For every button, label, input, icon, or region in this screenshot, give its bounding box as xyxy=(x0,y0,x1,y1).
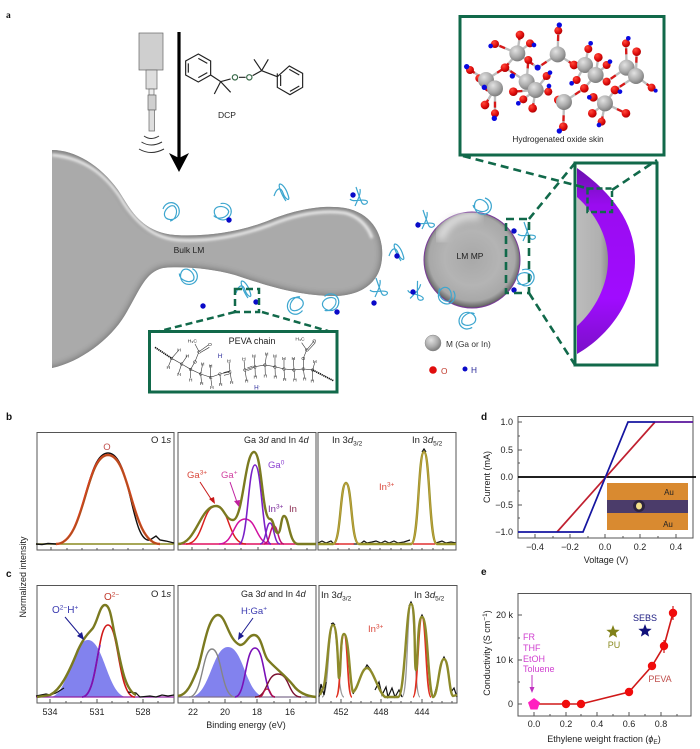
legend: atoms xyxy=(425,335,491,376)
chart: b In 3d xyxy=(318,432,456,550)
chain structure: H₃C xyxy=(295,336,305,342)
chart: b Ga 3d and In 4d: In xyxy=(289,504,297,515)
axis label: Normalized intensity: Normalized intensity xyxy=(18,536,28,618)
x tick labels: 0.4 xyxy=(591,719,603,729)
x tick labels: −0.4 xyxy=(526,542,544,552)
chain structure: H xyxy=(273,354,277,360)
chart: c In 3d: 3/2 xyxy=(342,596,352,602)
chain structure: O xyxy=(193,359,197,365)
x tick labels: 0.2 xyxy=(560,719,572,729)
x tick labels: 0.6 xyxy=(623,719,635,729)
x tick labels xyxy=(528,719,667,729)
x tick labels: 0.0 xyxy=(528,719,540,729)
chain structure: C xyxy=(263,363,267,369)
chain structure: · xyxy=(259,384,260,388)
chain structure: C xyxy=(228,369,232,375)
solvent list: FR xyxy=(523,632,535,642)
x tick labels: 0.2 xyxy=(634,542,646,552)
chart: c In 3d: In 3d xyxy=(321,590,342,601)
inset micrograph: Au xyxy=(664,488,674,497)
liquid metal microparticle xyxy=(424,212,520,308)
chain structure: H xyxy=(265,352,269,358)
chain structure: C xyxy=(305,348,309,354)
chain structure: C xyxy=(218,372,222,378)
legend: atoms: M (Ga or In) xyxy=(446,339,491,349)
chain structure: · xyxy=(222,353,224,357)
x tick labels: 452 xyxy=(333,707,349,717)
x tick labels: 20 xyxy=(220,707,230,717)
x tick labels xyxy=(188,707,295,717)
solvent list: THF xyxy=(523,643,541,653)
magnified cross-section of particle xyxy=(575,163,657,365)
chart: e conductivity versus ethylene fraction: PU xyxy=(608,640,620,650)
chain structure: H xyxy=(230,380,234,386)
y tick labels: 20 k xyxy=(496,610,513,620)
molecule model xyxy=(464,22,658,134)
chart: b Ga 3d and In 4d: Ga xyxy=(268,460,281,471)
x tick labels xyxy=(42,707,151,717)
chain structure: H xyxy=(189,377,193,383)
chart: c Ga 3d and In 4d: + xyxy=(263,606,267,612)
x tick labels: 444 xyxy=(414,707,430,717)
PEVA polymer chains and hydrogen atoms xyxy=(163,184,537,332)
y tick labels: 10 k xyxy=(496,655,513,665)
y tick labels: 0.0 xyxy=(500,472,513,482)
x tick labels: 0.0 xyxy=(599,542,611,552)
chart: b In 3d: In 3d xyxy=(412,435,433,446)
chain structure: O xyxy=(301,356,305,362)
panel label d: d xyxy=(481,412,487,423)
chain structure: C xyxy=(180,362,184,368)
bulk liquid metal droplet xyxy=(30,150,382,368)
chart: c O 1s xyxy=(36,586,174,717)
chain structure: H xyxy=(245,379,249,385)
chain structure: H xyxy=(274,374,278,380)
chart: e conductivity versus ethylene fraction: PEVA xyxy=(648,674,672,684)
marker: solvents pentagon xyxy=(528,698,540,710)
x tick labels: 18 xyxy=(252,707,262,717)
axis label: Binding energy: Binding energy (eV) xyxy=(206,720,286,730)
chart: d current versus voltage: Voltage (V) xyxy=(584,555,628,565)
chart: b Ga 3d and In 4d: In xyxy=(268,504,276,515)
chart: e conductivity versus ethylene fraction: SEBS xyxy=(633,613,657,623)
chart: b Ga 3d and In 4d xyxy=(178,432,316,550)
inset micrograph: Au xyxy=(663,520,673,529)
x tick labels xyxy=(526,542,682,552)
chart: b Ga 3d and In 4d: 3+ xyxy=(200,470,207,476)
chain structure: H xyxy=(242,357,246,363)
panel label a: a xyxy=(6,11,11,21)
chart: c O 1s: H xyxy=(67,605,74,616)
chain structure: C xyxy=(197,349,201,355)
chart: c O 1s: 2− xyxy=(112,592,119,598)
inset micrograph xyxy=(607,483,688,530)
chain structure: H xyxy=(219,382,223,388)
chart: c O 1s: O xyxy=(104,592,112,603)
y tick labels: −1.0 xyxy=(495,527,513,537)
chain structure: H xyxy=(254,374,258,380)
chart: c Ga 3d and In 4d xyxy=(178,586,316,717)
chart: c Ga 3d and In 4d: Ga 3d and In 4d xyxy=(241,589,307,599)
chart: c Ga 3d and In 4d: H:Ga xyxy=(241,606,263,617)
chart: c O 1s: O xyxy=(52,605,60,616)
panel label c: c xyxy=(6,569,12,580)
chart: e conductivity versus ethylene fraction: Conductivity (S cm xyxy=(482,621,492,696)
chain structure: H xyxy=(254,385,259,392)
chain structure: H xyxy=(292,356,296,362)
chart: c In 3d: In xyxy=(368,624,376,635)
y tick labels: −0.5 xyxy=(495,500,513,510)
y tick labels: 1.0 xyxy=(500,417,513,427)
x tick labels xyxy=(333,707,430,717)
marker: PU star xyxy=(606,625,620,638)
chart: e conductivity versus ethylene fraction: E xyxy=(653,739,658,746)
chain structure: C xyxy=(302,367,306,373)
solvent list: EtOH xyxy=(523,654,545,664)
chain structure: H xyxy=(201,362,205,368)
chain structure: C xyxy=(311,368,315,374)
label: Hydrogenated oxide skin: Hydrogenated oxide skin xyxy=(512,134,604,144)
y tick labels: 0.5 xyxy=(500,445,513,455)
chart: d current versus voltage xyxy=(482,416,696,565)
chain structure: H xyxy=(313,359,317,365)
chart: e conductivity versus ethylene fraction: ) xyxy=(482,610,492,613)
chain structure: H xyxy=(252,353,256,359)
chemical structure: DCP xyxy=(186,54,303,95)
chain structure: C xyxy=(243,368,247,374)
chart: c In 3d xyxy=(319,586,457,717)
panel label e: e xyxy=(481,567,487,578)
x tick labels: 531 xyxy=(89,707,105,717)
chart: e conductivity versus ethylene fraction xyxy=(482,594,691,746)
chart: b Ga 3d and In 4d: + xyxy=(234,470,238,476)
x tick labels: 22 xyxy=(188,707,198,717)
icon: sonication probe xyxy=(139,33,164,152)
chart: c O 1s: + xyxy=(74,604,78,612)
chart: c O 1s: O 1s xyxy=(151,589,171,600)
zoom indicator: droplet to PEVA chain xyxy=(160,289,328,331)
y tick labels xyxy=(495,417,513,537)
zoom indicator: particle to cross-section xyxy=(506,163,575,365)
chain structure: H xyxy=(218,353,222,360)
x tick labels: 0.4 xyxy=(670,542,682,552)
chart: c In 3d: 3+ xyxy=(376,624,384,630)
chain structure: H xyxy=(210,385,214,391)
chain structure: H xyxy=(282,356,286,362)
solvent list xyxy=(523,632,555,674)
chain structure: H xyxy=(186,353,190,359)
chain structure: H₃C xyxy=(188,339,197,345)
chain structure: C xyxy=(292,368,296,374)
chart: b Ga 3d and In 4d: 0 xyxy=(281,460,285,466)
chart: e conductivity versus ethylene fraction: −1 xyxy=(482,613,489,621)
chain structure: H xyxy=(227,358,231,364)
chart: b O 1s xyxy=(36,432,174,550)
marker: SEBS star xyxy=(638,624,652,637)
chart: d current versus voltage: Current (mA) xyxy=(482,451,492,503)
chain structure: H xyxy=(264,373,268,379)
chain structure: H xyxy=(209,363,213,369)
chain structure: C xyxy=(209,375,213,381)
zoom indicator: cross-section to oxide skin xyxy=(463,156,657,190)
chart: b In 3d: 3/2 xyxy=(353,440,363,448)
chain structure: H xyxy=(177,348,181,354)
chart: b Ga 3d and In 4d: 3+ xyxy=(276,504,284,510)
chain structure: H xyxy=(293,378,297,384)
chain structure: C xyxy=(189,367,193,373)
chart: b Ga 3d and In 4d: Ga xyxy=(221,470,234,481)
x tick labels: 16 xyxy=(285,707,295,717)
chart: e conductivity versus ethylene fraction: ) xyxy=(658,734,661,744)
label: LM MP: LM MP xyxy=(457,251,484,261)
chain structure: C xyxy=(282,367,286,373)
chart: e conductivity versus ethylene fraction: Ethylene weight fraction (ϕ xyxy=(547,734,653,744)
legend: atoms: O xyxy=(441,366,448,376)
chart: c In 3d: 5/2 xyxy=(435,596,445,602)
chart: b In 3d: 3+ xyxy=(387,482,395,488)
chain structure: H xyxy=(167,365,171,371)
chain structure: H xyxy=(311,379,315,385)
chain structure: C xyxy=(199,372,203,378)
legend: atoms: H xyxy=(471,365,477,375)
chain structure: C xyxy=(253,364,257,370)
chart: b O 1s: O 1s xyxy=(151,435,171,446)
chain structure xyxy=(155,336,333,392)
x tick labels: 534 xyxy=(42,707,58,717)
arrow: solvents to marker xyxy=(530,675,534,693)
chart: b In 3d: In 3d xyxy=(332,435,353,446)
chain structure: O xyxy=(208,342,212,348)
chain structure: C xyxy=(170,356,174,362)
panel label b: b xyxy=(6,412,12,423)
x tick labels: 0.8 xyxy=(655,719,667,729)
label: DCP: DCP xyxy=(218,110,236,120)
arrow: downward process arrow xyxy=(169,32,189,172)
panel: PEVA chain xyxy=(150,332,337,392)
chart: b Ga 3d and In 4d: Ga xyxy=(187,470,200,481)
x tick labels: 448 xyxy=(373,707,389,717)
chart: b Ga 3d and In 4d: Ga 3d and In 4d xyxy=(244,435,310,445)
chart: c O 1s: 2− xyxy=(60,604,67,612)
chain structure: H xyxy=(303,376,307,382)
solvent list: Toluene xyxy=(523,664,555,674)
chart: b In 3d: 5/2 xyxy=(433,440,443,448)
chain structure: C xyxy=(273,364,277,370)
label: PEVA chain: PEVA chain xyxy=(229,336,275,346)
label: Bulk LM: Bulk LM xyxy=(174,245,204,255)
y tick labels: 0 xyxy=(508,699,513,709)
chain structure: O xyxy=(312,338,316,344)
chart: c In 3d: In 3d xyxy=(414,590,435,601)
chain structure: H xyxy=(177,372,181,378)
chart: b In 3d: In xyxy=(379,482,387,493)
x tick labels: −0.2 xyxy=(561,542,579,552)
panel: hydrogenated oxide skin xyxy=(460,16,664,155)
y tick labels xyxy=(496,610,513,709)
chain structure: H xyxy=(200,381,204,387)
x tick labels: 528 xyxy=(135,707,151,717)
chart: b O 1s: O xyxy=(103,442,111,453)
chain structure: H xyxy=(283,377,287,383)
